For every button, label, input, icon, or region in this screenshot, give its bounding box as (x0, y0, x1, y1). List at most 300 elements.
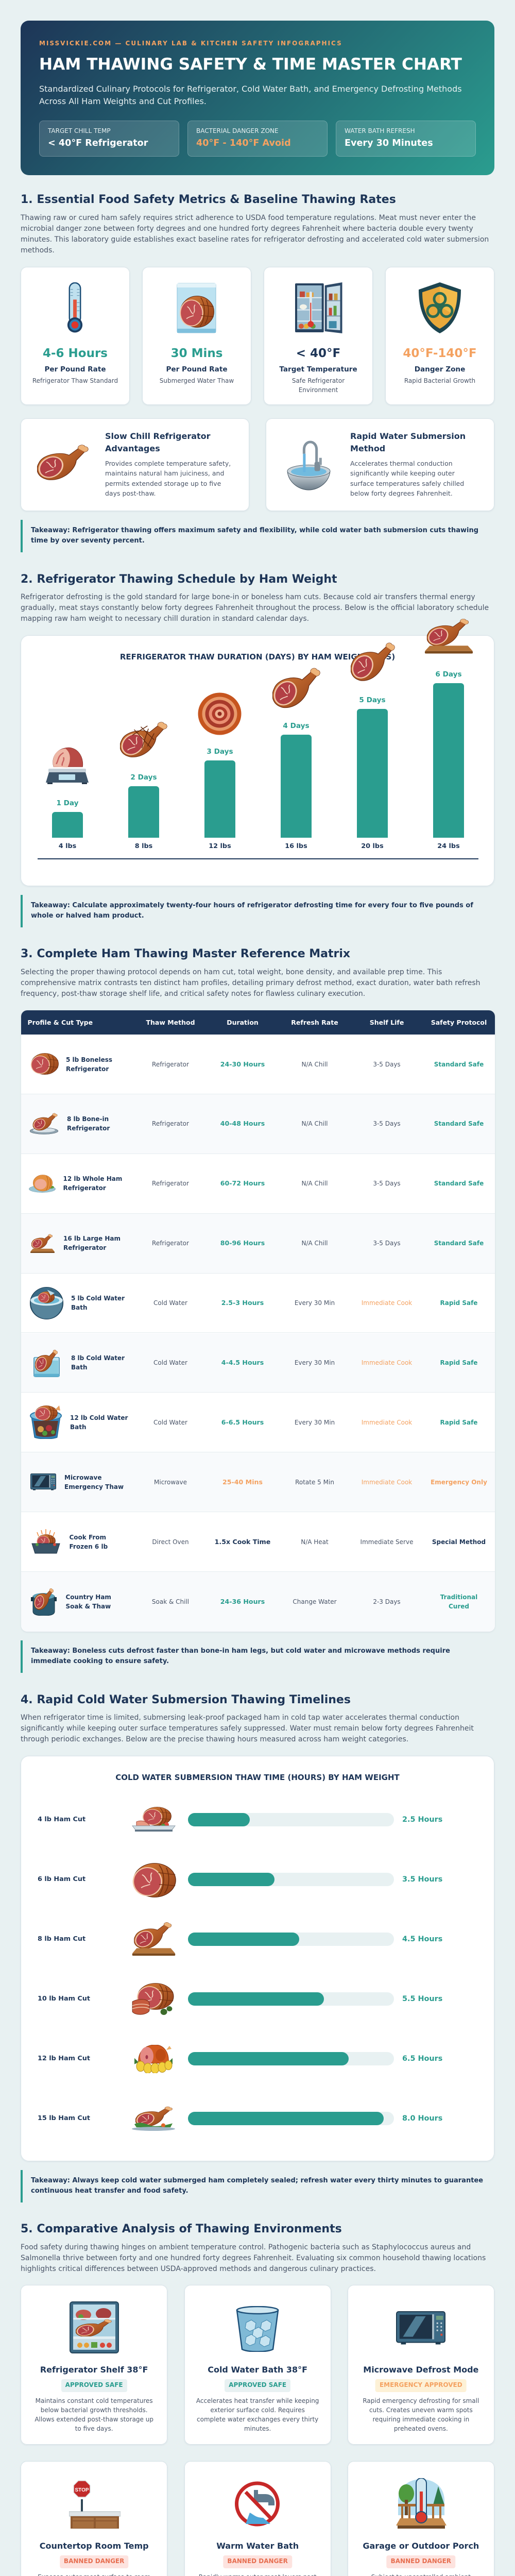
metric note (292, 377, 345, 394)
badge (223, 2555, 292, 2568)
stat: water bath refresh: WATER BATH REFRESH (345, 127, 415, 134)
text: section 5 intro: Salmonella thrive between forty and one hundred forty degrees Fahrenheit. Evaluating six common household thawing locations (21, 2253, 486, 2262)
icon: ham in roasting tray (31, 1529, 60, 1554)
card text: maintains natural ham juiciness, and (105, 469, 224, 477)
text: section 4 intro (21, 1714, 474, 1743)
icon: ham in tub (30, 1405, 62, 1439)
stat: target chill temp (39, 121, 179, 157)
card text: Accelerates thermal conduction (350, 460, 453, 467)
card: garage or outdoor porch (348, 2461, 494, 2576)
card text (21, 2396, 167, 2433)
heading: section 5: 5. Comparative Analysis of Thawing Environments (21, 2223, 342, 2235)
icon: glazed ham leg (272, 668, 320, 708)
table header: Duration (227, 1019, 259, 1026)
row: 12 lb whole ham: Refrigerator (63, 1184, 106, 1192)
icon: ham on board (30, 1234, 55, 1253)
row: microwave emergency thaw: Microwave (154, 1479, 187, 1486)
card title: Warm Water Bath (216, 2541, 299, 2551)
row: 12 lb cold water bath: Cold Water (153, 1419, 187, 1426)
row: 5 lb boneless: Refrigerator (66, 1065, 109, 1073)
card title: Cold Water Bath 38°F (208, 2365, 307, 2375)
icon: ham on plate (30, 1113, 58, 1134)
card: countertop room temp (21, 2461, 167, 2576)
row: 8 lb bone-in: Refrigerator (67, 1125, 110, 1132)
weight label: 8 lbs (135, 842, 152, 850)
card: microwave defrost (348, 2285, 494, 2445)
card text: below forty degrees Fahrenheit. (350, 489, 453, 497)
takeaway: section 4: Takeaway: Always keep cold water submerged ham completely sealed; refresh water every thirty minutes to guarantee (31, 2177, 483, 2184)
row: 5 lb boneless: 5 lb Boneless (66, 1056, 112, 1063)
row: 8 lb bone-in: 8 lb Bone-in (67, 1115, 109, 1123)
row: cook from frozen: Direct Oven (152, 1538, 189, 1546)
metric value: 4-6 Hours (43, 347, 108, 360)
row: 5 lb cold water bath: Rapid Safe (440, 1299, 477, 1307)
row: 5 lb cold water bath (21, 1274, 495, 1333)
icon: ham in bowl (30, 1287, 63, 1319)
card text: preheated ovens. (394, 2425, 448, 2432)
table: master reference matrix (21, 1010, 495, 1632)
text: section 3 intro: comprehensive matrix contrasts ten distinct ham profiles, detailing primary defrost method, exact duration, water bath refresh (21, 979, 480, 987)
takeaway: section 4 (21, 2170, 494, 2202)
row: microwave emergency thaw: Emergency Only (431, 1479, 487, 1486)
card text: cuts. Creates uneven warm spots (369, 2406, 473, 2414)
row: 12 lb whole ham: Refrigerator (152, 1180, 189, 1187)
row: cook from frozen: 1.5x Cook Time (215, 1538, 270, 1546)
progress bar (188, 2052, 394, 2065)
row: cook from frozen: Immediate Serve (360, 1538, 413, 1546)
bar (204, 760, 235, 838)
row: 8 lb bone-in: N/A Chill (301, 1120, 328, 1127)
row label: 15 lb Ham Cut (38, 2114, 90, 2122)
row: 5 lb cold water bath: Bath (71, 1304, 88, 1311)
card text: permits extended storage up to five (105, 480, 221, 487)
weight label: 24 lbs (437, 842, 460, 850)
bar (433, 683, 464, 838)
icon: ham leg (37, 445, 89, 480)
card title: Refrigerator Shelf 38°F (40, 2365, 148, 2375)
row: country ham: Soak & Chill (152, 1598, 189, 1605)
table header: Refresh Rate (291, 1019, 338, 1026)
takeaway: section 1: Takeaway: Refrigerator thawing offers maximum safety and flexibility, while cold water bath submersion cuts thawing (31, 527, 478, 534)
row: 8 lb bone-in: Standard Safe (434, 1120, 484, 1127)
row: 8 lb bone-in (21, 1094, 495, 1154)
chart title: COLD WATER SUBMERSION THAW TIME (HOURS) BY HAM WEIGHT (115, 1773, 400, 1782)
value: 4 Days (283, 722, 310, 730)
bar row: 10 lb (21, 1969, 494, 2029)
subtitle: Standardized Culinary Protocols for Refrigerator, Cold Water Bath, and Emergency Defrosting Methods (39, 84, 462, 94)
card text: complete water exchanges every thirty (197, 2416, 318, 2423)
icon: ham in water glass (33, 1350, 60, 1377)
card title: Microwave Defrost Mode (363, 2365, 478, 2375)
row: microwave emergency thaw (21, 1452, 495, 1512)
row label: 10 lb Ham Cut (38, 1995, 90, 2003)
table header: Profile & Cut Type (28, 1019, 93, 1026)
row: 12 lb whole ham (21, 1154, 495, 1214)
badge: BANNED DANGER (391, 2557, 451, 2565)
badge: BANNED DANGER (64, 2557, 124, 2565)
icon: long ham leg (351, 643, 395, 681)
metric note: Environment (299, 386, 338, 394)
takeaway: section 2: Takeaway: Calculate approximately twenty-four hours of refrigerator defrosting time for every four to five pounds of (31, 902, 473, 909)
bar row: 8 lb (21, 1909, 494, 1969)
title: HAM THAWING SAFETY & TIME MASTER CHART (39, 55, 462, 74)
card text: days post-thaw. (105, 489, 156, 497)
card title: Garage or Outdoor Porch (363, 2541, 479, 2551)
row: cook from frozen: Frozen 6 lb (69, 1543, 108, 1550)
heading: section 4: 4. Rapid Cold Water Submersion Thawing Timelines (21, 1693, 351, 1706)
value: 3 Days (207, 748, 233, 756)
column: 4 lbs (46, 747, 89, 850)
text: section 3 intro: frequency, post-thaw storage shelf life, and critical safety notes for flawless culinary execution. (21, 989, 365, 997)
takeaway: section 3 (21, 1640, 494, 1673)
row: 12 lb whole ham: 12 lb Whole Ham (63, 1175, 122, 1182)
takeaway: section 4: continuous heat transfer and food safety. (31, 2187, 188, 2195)
metric value: 40°F-140°F (403, 347, 477, 360)
row: 8 lb cold water bath: Immediate Cook (362, 1359, 412, 1366)
text: section 5 intro: Food safety during thawing hinges on ambient temperature control. Pathogenic bacteria such as Staphylococcus aureus and (21, 2243, 471, 2251)
badge: EMERGENCY APPROVED (380, 2381, 462, 2388)
text: section 2 intro: Refrigerator defrosting is the gold standard for large bone-in or boneless ham cuts. Because cold air transfers thermal energy (21, 592, 475, 601)
metric note: Safe Refrigerator (292, 377, 345, 384)
row: 12 lb whole ham: 3-5 Days (373, 1180, 401, 1187)
metric value: 30 Mins (171, 347, 222, 360)
icon: ham on board (424, 619, 473, 653)
card text: surface temperatures safely chilled (350, 480, 464, 487)
text: section 2 intro: gradually, meat stays constantly below forty degrees Fahrenheit throughout the process. Below is the official laboratory schedule (21, 604, 489, 612)
text: section 5 intro: highlights critical differences between USDA-approved methods and dangerous culinary practices. (21, 2265, 376, 2273)
card text (350, 460, 464, 497)
subtitle (39, 84, 462, 106)
metric label: Danger Zone (415, 365, 465, 374)
row label: 4 lb Ham Cut (38, 1816, 85, 1823)
metric card: 30 mins (142, 267, 251, 405)
icon: ham with pineapple (131, 2045, 176, 2073)
row: 12 lb whole ham: Standard Safe (434, 1180, 484, 1187)
text: section 4 intro: significantly while keeping outer surface temperatures safely suppressed. Water must remain below forty degrees Fahrenheit (21, 1724, 474, 1732)
stat: bacterial danger zone (187, 121, 328, 157)
icon: sliced ham on tray (132, 1807, 176, 1832)
card: rapid water submersion method (266, 418, 494, 511)
card text: significantly while keeping outer (350, 469, 455, 477)
row: 5 lb boneless: Refrigerator (152, 1060, 189, 1067)
bar (357, 709, 388, 838)
takeaway: section 1: time by over seventy percent. (31, 537, 145, 545)
table header (21, 1010, 495, 1035)
bar row: 15 lb (21, 2089, 494, 2148)
takeaway: section 3: Takeaway: Boneless cuts defrost faster than bone-in ham legs, but cold water and microwave methods require (31, 1647, 450, 1655)
progress bar (188, 1873, 394, 1886)
takeaway: section 2 (21, 895, 494, 927)
row: 12 lb cold water bath: Rapid Safe (440, 1419, 477, 1426)
row: 16 lb large ham: Refrigerator (63, 1244, 106, 1251)
badge: BANNED DANGER (227, 2557, 288, 2565)
row: country ham: Traditional (440, 1594, 477, 1601)
row: microwave emergency thaw: Immediate Cook (362, 1479, 412, 1486)
row: 8 lb cold water bath: Cold Water (153, 1359, 187, 1366)
stat: water bath refresh: Every 30 Minutes (345, 138, 433, 148)
card: warm water bath (184, 2461, 331, 2576)
icon: ham on platter (131, 2106, 176, 2131)
metric label: Target Temperature (279, 365, 357, 374)
progress bar (188, 1992, 394, 2006)
text: section 1 intro: minutes. This laboratory guide establishes exact baseline rates for refrigerator defrosting and accelerated cold water submersion (21, 235, 489, 243)
text: section 3 intro: Selecting the proper thawing protocol depends on ham cut, total weight, bone density, and available prep time. This (21, 968, 442, 976)
text: section 2 intro: mapping raw ham weight to necessary chill duration in standard calendar days. (21, 614, 309, 622)
row: microwave emergency thaw: 25-40 Mins (222, 1478, 263, 1486)
metric note: Submerged Water Thaw (160, 377, 234, 384)
metric label: Per Pound Rate (166, 365, 228, 374)
card text: Rapid emergency defrosting for small (363, 2397, 479, 2404)
stat: target chill temp: < 40°F Refrigerator (48, 138, 148, 148)
row: 16 lb large ham: 3-5 Days (373, 1240, 401, 1247)
row: 5 lb cold water bath: Immediate Cook (362, 1299, 412, 1307)
row: 8 lb cold water bath: 8 lb Cold Water (71, 1354, 125, 1362)
text: section 4 intro: When refrigerator time is limited, submersing leak-proof packaged ham in cold tap water accelerates thermal conduction (21, 1714, 459, 1722)
value: 2 Days (130, 773, 157, 782)
row: 5 lb cold water bath: 2.5-3 Hours (221, 1299, 264, 1307)
column: 16 lbs (272, 668, 320, 850)
value: 5.5 Hours (402, 1995, 442, 2003)
card: slow chill refrigerator advantages (21, 418, 249, 511)
heading: section 2: 2. Refrigerator Thawing Schedule by Ham Weight (21, 573, 337, 585)
row: 8 lb cold water bath (21, 1333, 495, 1393)
subtitle: Across All Ham Weights and Cut Profiles. (39, 96, 207, 106)
icon: faucet and bowl (287, 441, 331, 490)
row label: 12 lb Ham Cut (38, 2055, 90, 2062)
icon: bagged ham (177, 283, 216, 333)
row: 12 lb cold water bath: 6-6.5 Hours (221, 1418, 264, 1426)
row: microwave emergency thaw: Emergency Thaw (64, 1483, 124, 1490)
stat: bacterial danger zone: 40°F - 140°F Avoid (196, 138, 291, 148)
card text: exterior surface cold. Requires (210, 2406, 305, 2414)
row: 12 lb whole ham: 60-72 Hours (220, 1179, 265, 1187)
row: cook from frozen: Special Method (432, 1538, 486, 1546)
value: 6.5 Hours (402, 2055, 442, 2063)
card text (105, 460, 231, 497)
badge (61, 2379, 127, 2392)
row: 16 lb large ham: 80-96 Hours (220, 1239, 265, 1247)
stat: bacterial danger zone: BACTERIAL DANGER ZONE (196, 127, 279, 134)
card: cold water bath (184, 2285, 331, 2445)
row: 12 lb cold water bath (21, 1393, 495, 1452)
icon: boneless ham (31, 1053, 59, 1075)
row: 8 lb bone-in: 40-48 Hours (220, 1120, 265, 1127)
badge (387, 2555, 455, 2568)
text: section 1 intro (21, 213, 489, 255)
row: 8 lb cold water bath: 4-4.5 Hours (221, 1359, 264, 1366)
card text (348, 2396, 494, 2433)
metric note: Refrigerator Thaw Standard (32, 377, 118, 384)
icon: netted ham (120, 722, 167, 757)
row: 12 lb whole ham: N/A Chill (301, 1180, 328, 1187)
column: 24 lbs (424, 619, 473, 850)
stat: target chill temp: TARGET CHILL TEMP (48, 127, 111, 134)
column: 20 lbs (351, 643, 395, 850)
badge: APPROVED SAFE (229, 2381, 286, 2388)
bar chart: refrigerator thaw duration (21, 635, 494, 886)
metric value: < 40°F (296, 347, 340, 360)
icon: thermometer on porch (396, 2478, 447, 2529)
icon: glass of ice water (236, 2306, 279, 2352)
icon: microwave (396, 2311, 445, 2345)
value: 8.0 Hours (402, 2114, 442, 2123)
icon: ham on cutting board (131, 1922, 176, 1956)
weight label: 4 lbs (59, 842, 76, 850)
text: section 2 intro (21, 592, 489, 622)
row: country ham (21, 1572, 495, 1632)
x axis (38, 858, 478, 859)
card text: minutes. (244, 2425, 271, 2432)
icon: stop sign on counter (69, 2479, 121, 2529)
row: country ham: Country Ham (66, 1594, 111, 1601)
table header: Thaw Method (146, 1019, 195, 1026)
metric card: under 40F (264, 267, 373, 405)
card title: Countertop Room Temp (40, 2541, 149, 2551)
text: section 1 intro: microbial danger zone between forty degrees and one hundred forty degrees Fahrenheit where bacteria double every twenty (21, 225, 473, 233)
bar chart: cold water submersion thaw time (21, 1756, 494, 2161)
bar row: 12 lb (21, 2029, 494, 2089)
text: section 4 intro: through periodic exchanges. Below are the precise thawing hours measured across ham weight categories. (21, 1735, 408, 1743)
card text: below bacterial growth thresholds. (41, 2406, 148, 2414)
icon: open refrigerator (295, 282, 342, 333)
icon: biohazard shield (419, 282, 461, 333)
row: 16 lb large ham (21, 1214, 495, 1274)
icon: spiral ham (198, 692, 241, 735)
icon: netted round ham (131, 1863, 176, 1897)
card title: Slow Chill Refrigerator (105, 431, 211, 441)
row label: 6 lb Ham Cut (38, 1875, 85, 1883)
value: 3.5 Hours (402, 1875, 442, 1884)
row: 5 lb cold water bath: Cold Water (153, 1299, 187, 1307)
row: 12 lb cold water bath: 12 lb Cold Water (70, 1414, 128, 1421)
row: cook from frozen (21, 1512, 495, 1572)
text: section 5 intro (21, 2242, 486, 2274)
card text: Provides complete temperature safety, (105, 460, 231, 467)
row: microwave emergency thaw: Microwave (64, 1474, 101, 1481)
row: 8 lb cold water bath: Every 30 Min (295, 1359, 335, 1366)
metric label: Per Pound Rate (44, 365, 106, 374)
card text: Allows extended post-thaw storage up (35, 2416, 153, 2423)
row: 5 lb cold water bath: Every 30 Min (295, 1299, 335, 1307)
card text: requiring immediate cooking in (372, 2416, 469, 2423)
metric card: 4-6 hours (21, 267, 130, 405)
value: 6 Days (435, 670, 462, 679)
row: cook from frozen: N/A Heat (301, 1538, 329, 1546)
row: 12 lb cold water bath: Immediate Cook (362, 1419, 412, 1426)
row: 12 lb cold water bath: Every 30 Min (295, 1419, 335, 1426)
card: refrigerator shelf (21, 2285, 167, 2445)
weight label: 16 lbs (285, 842, 307, 850)
row: 8 lb cold water bath: Rapid Safe (440, 1359, 477, 1366)
bar (281, 735, 312, 838)
card title: Advantages (105, 444, 160, 453)
takeaway: section 2: whole or halved ham product. (31, 912, 144, 920)
row: 16 lb large ham: Refrigerator (152, 1240, 189, 1247)
card text: Maintains constant cold temperatures (36, 2397, 153, 2404)
icon: refrigerator interior (70, 2301, 119, 2353)
takeaway: section 1 (21, 520, 494, 552)
bar (128, 786, 159, 838)
text: section 3 intro (21, 968, 480, 997)
metric card: danger zone (385, 267, 494, 405)
progress bar (188, 1813, 394, 1826)
row: 5 lb boneless: 24-30 Hours (220, 1060, 265, 1067)
row: 16 lb large ham: Standard Safe (434, 1240, 484, 1247)
table header: Shelf Life (370, 1019, 404, 1026)
row: 5 lb cold water bath: 5 lb Cold Water (71, 1295, 125, 1302)
card title: Rapid Water Submersion (350, 431, 466, 441)
badge (225, 2379, 290, 2392)
badge (60, 2555, 128, 2568)
card text: Accelerates heat transfer while keeping (196, 2397, 319, 2404)
icon: whole ham on plate (29, 1175, 56, 1193)
row: 16 lb large ham: 16 lb Large Ham (63, 1235, 121, 1242)
progress bar (188, 2112, 394, 2125)
row: 12 lb cold water bath: Bath (70, 1423, 87, 1431)
value: 4.5 Hours (402, 1935, 442, 1943)
row: 5 lb boneless: N/A Chill (301, 1060, 328, 1067)
weight label: 12 lbs (209, 842, 231, 850)
icon: thermometer (67, 282, 82, 333)
row: country ham: 24-36 Hours (220, 1598, 265, 1605)
row: country ham: Cured (449, 1603, 469, 1610)
row: 8 lb bone-in: 3-5 Days (373, 1120, 401, 1127)
row: cook from frozen: Cook From (69, 1534, 106, 1541)
card title (105, 431, 211, 453)
metric note: Rapid Bacterial Growth (404, 377, 475, 384)
bar row: 4 lb (38, 1807, 442, 1832)
icon: prohibited faucet (234, 2480, 280, 2527)
value: 5 Days (359, 696, 386, 704)
text: section 1 intro: Thawing raw or cured ham safely requires strict adherence to USDA food temperature regulations. Meat must never enter the (21, 213, 476, 222)
icon: ham in pot (31, 1588, 57, 1616)
row: 8 lb cold water bath: Bath (71, 1364, 88, 1371)
eyebrow: MISSVICKIE.COM — CULINARY LAB & KITCHEN SAFETY INFOGRAPHICS (39, 40, 342, 47)
weight label: 20 lbs (361, 842, 384, 850)
bar (52, 812, 83, 838)
table header: Safety Protocol (431, 1019, 487, 1026)
icon: microwave (30, 1473, 56, 1490)
card title (350, 431, 466, 453)
value: 2.5 Hours (402, 1816, 442, 1824)
icon: sliced netted ham (131, 1983, 176, 2016)
row: 8 lb bone-in: Refrigerator (152, 1120, 189, 1127)
chart title: REFRIGERATOR THAW DURATION (DAYS) BY HAM WEIGHT (LBS) (120, 652, 395, 662)
row: 5 lb boneless: 3-5 Days (373, 1060, 401, 1067)
row: country ham: Change Water (293, 1598, 337, 1605)
row label: 8 lb Ham Cut (38, 1935, 85, 1943)
badge: APPROVED SAFE (65, 2381, 123, 2388)
hero banner (21, 21, 494, 175)
row: microwave emergency thaw: Rotate 5 Min (295, 1479, 334, 1486)
row: 5 lb boneless (21, 1035, 495, 1094)
value: 1 Day (56, 799, 79, 807)
row: country ham: 2-3 Days (373, 1598, 401, 1605)
text: section 1 intro: methods. (21, 246, 55, 255)
row: 16 lb large ham: N/A Chill (301, 1240, 328, 1247)
card title: Method (350, 444, 385, 453)
card text: to five days. (75, 2425, 113, 2432)
bar row: 6 lb (21, 1850, 494, 1909)
column: 8 lbs (120, 722, 167, 850)
row: country ham: Soak & Thaw (66, 1603, 111, 1610)
heading: section 1: 1. Essential Food Safety Metrics & Baseline Thawing Rates (21, 193, 396, 206)
heading: section 3: 3. Complete Ham Thawing Master Reference Matrix (21, 947, 350, 960)
card text (184, 2396, 331, 2433)
icon: ham on scale (46, 747, 89, 784)
badge (375, 2379, 467, 2392)
takeaway: section 3: immediate cooking to ensure safety. (31, 1657, 169, 1665)
